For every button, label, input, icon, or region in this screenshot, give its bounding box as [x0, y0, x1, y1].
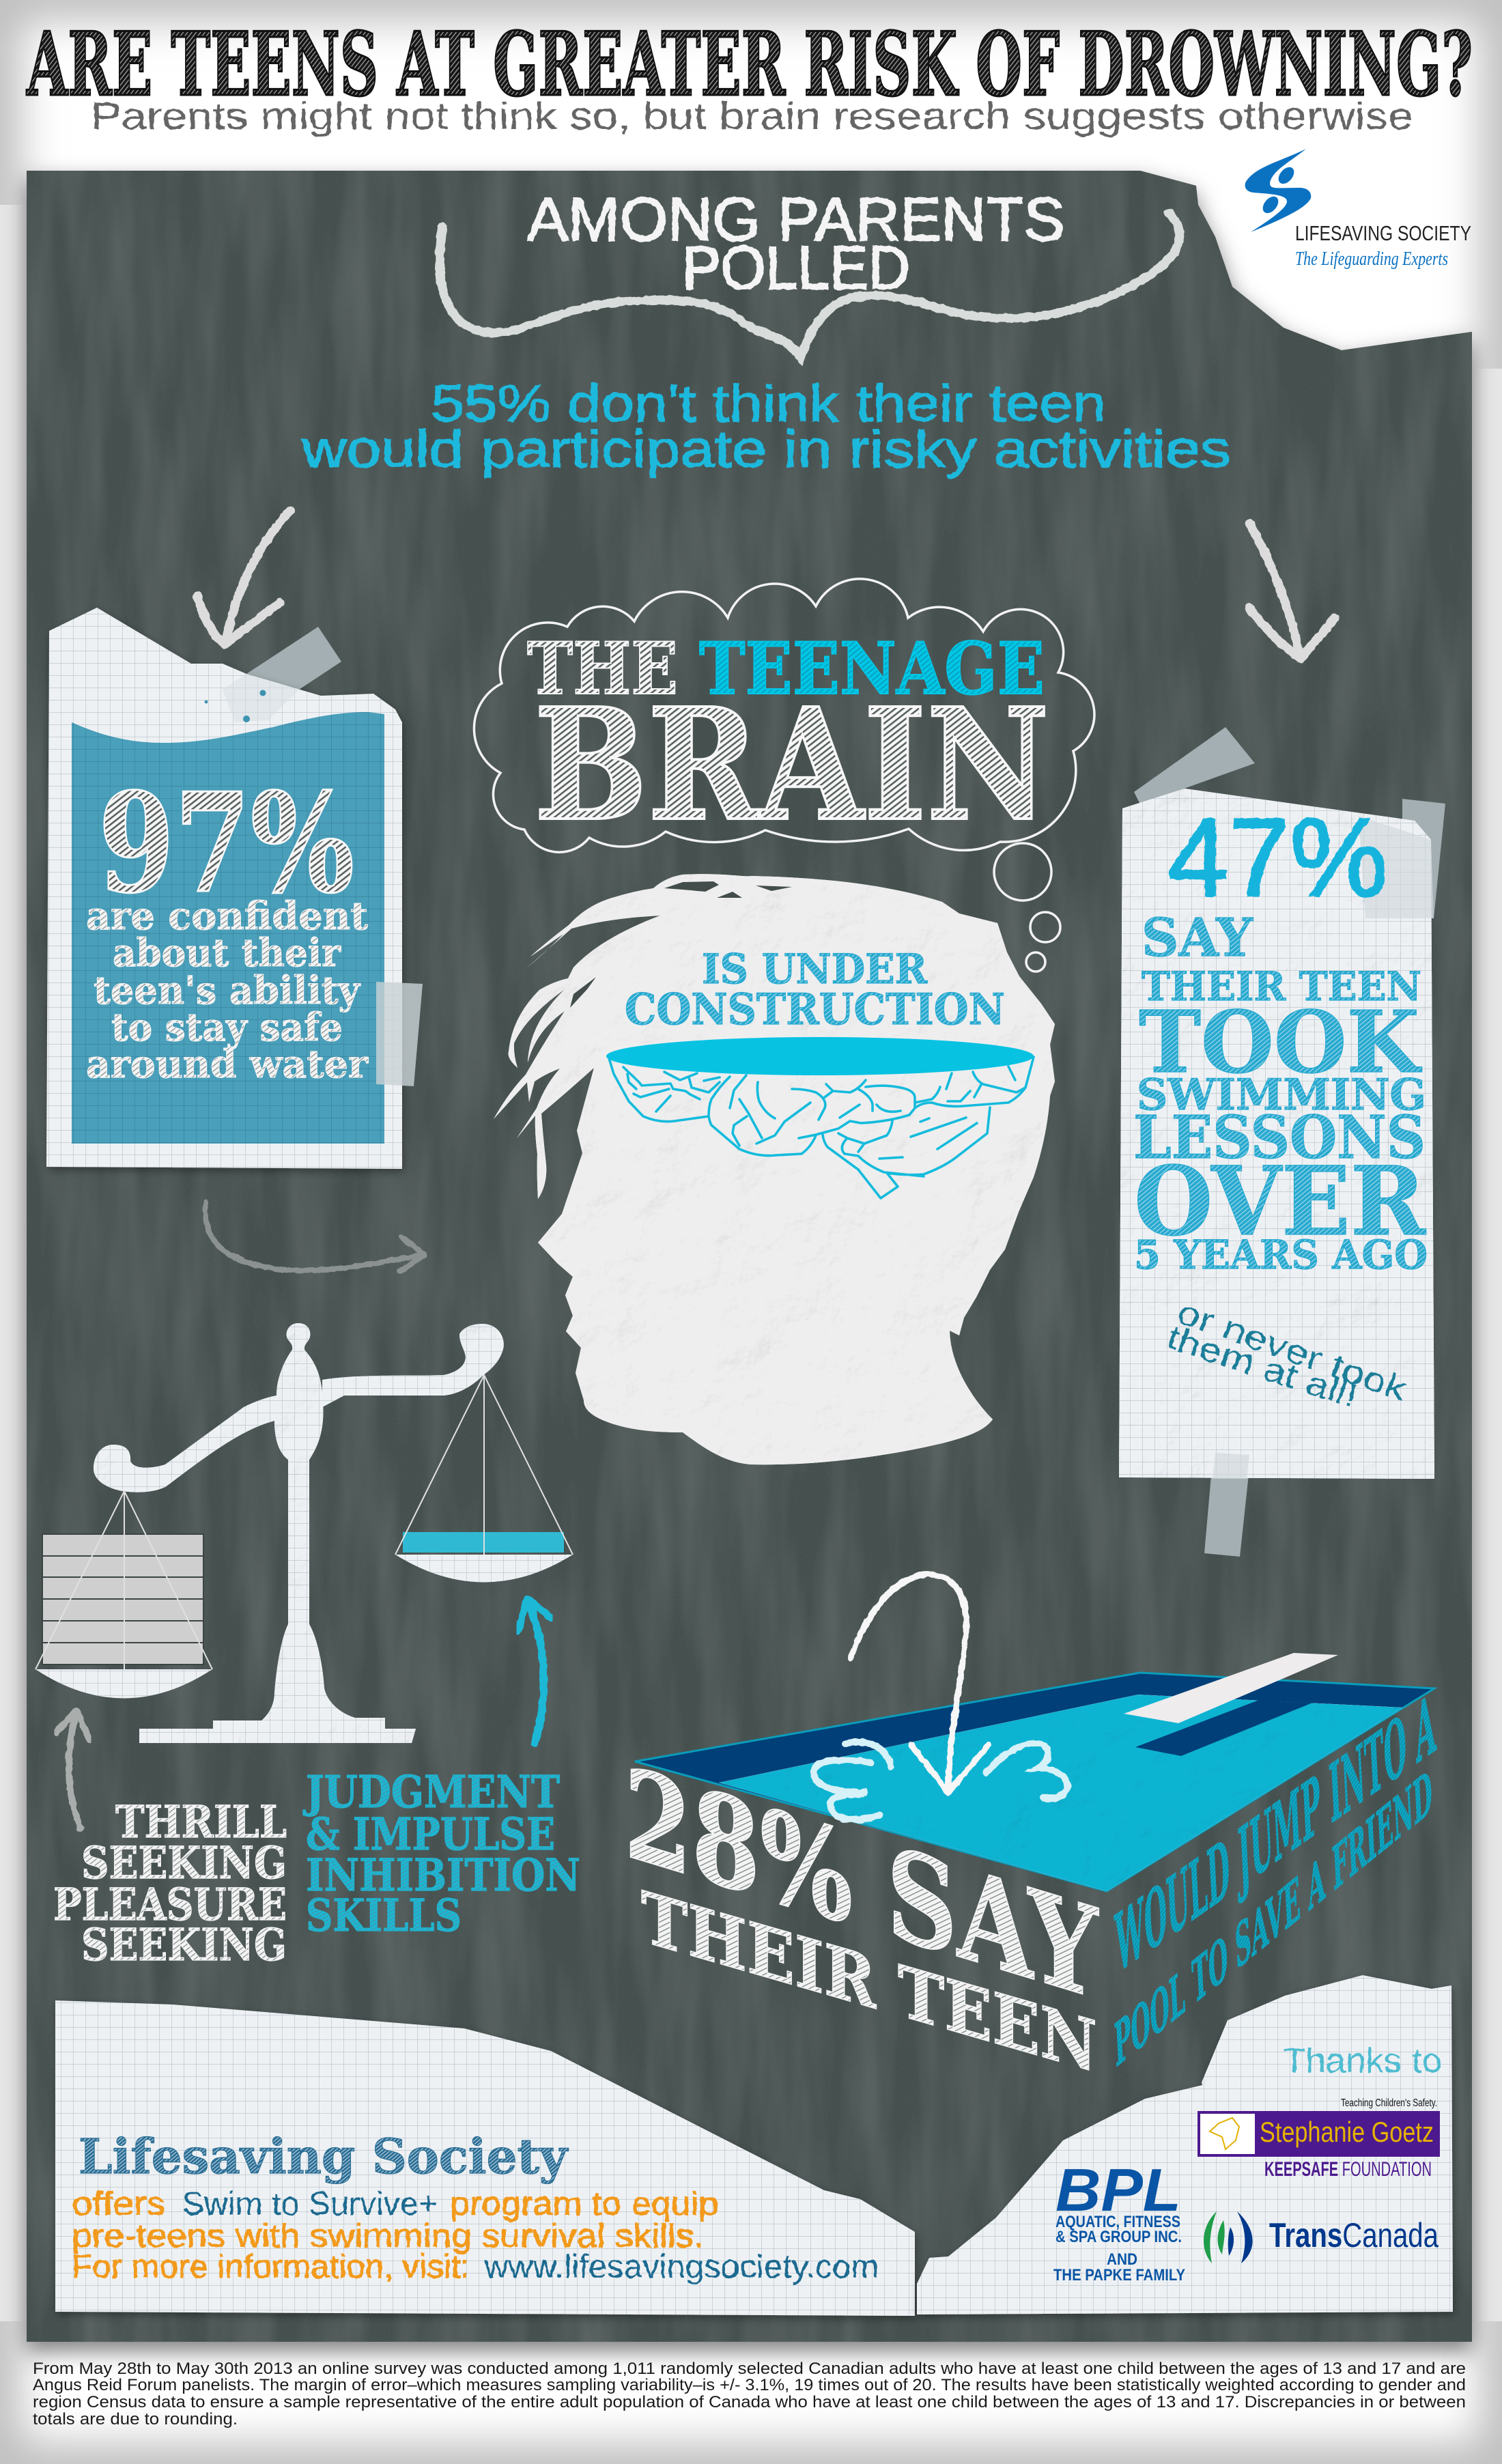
text: is under construction: IS UNDER — [702, 946, 928, 993]
paper sheet — [46, 608, 402, 1169]
text: would jump into a pool — [1113, 1675, 1438, 2082]
text: 28 percent say: 28% SAY — [624, 1738, 1099, 2028]
footnote: totals are due to rounding. — [33, 2410, 238, 2428]
label: judgment skills: & IMPULSE — [306, 1809, 555, 1860]
scale body — [94, 1323, 504, 1743]
footnote: Angus Reid Forum panelists. The margin of error–which measures sampling variability–is +/- 3.1%, 19 times out of 20. The results have been statistically weighted according to gender and — [33, 2376, 1466, 2394]
right strings — [395, 1375, 573, 1555]
text block: lessons: SAY — [1142, 907, 1253, 969]
pool water — [719, 1695, 1403, 1891]
heading: lifesaving society: Lifesaving Society — [79, 2128, 569, 2185]
label: thrill seeking: PLEASURE — [53, 1879, 287, 1931]
arrow: paper to scale — [206, 1202, 425, 1271]
chalk speech bracket — [440, 213, 1180, 357]
pool wall — [635, 1673, 1434, 1891]
note: or never took: or never took — [1172, 1292, 1413, 1408]
arrow: dive into pool — [851, 1574, 989, 1792]
left pan — [36, 1669, 212, 1699]
text block: program: pre-teens with swimming survival skills. — [72, 2218, 704, 2254]
text block: confidence — [86, 894, 369, 1087]
text block: confidence: are confident — [86, 894, 368, 939]
text block: program — [72, 2186, 879, 2285]
tape overlays — [1213, 816, 1434, 1479]
label: judgment skills: SKILLS — [306, 1890, 462, 1942]
heading: among parents polled — [527, 186, 1065, 302]
label: thrill seeking: SEEKING — [81, 1919, 287, 1971]
callout: 55 percent: 55% don't think their teen — [431, 375, 1106, 433]
text block: confidence: teen's ability — [94, 968, 360, 1013]
head silhouette — [494, 874, 1055, 1464]
left pan stack — [42, 1534, 203, 1665]
text block: confidence: to stay safe — [111, 1005, 343, 1050]
text block: lessons: THEIR TEEN — [1142, 963, 1421, 1010]
callout: 55 percent — [301, 375, 1231, 479]
heading: the teenage brain: THE — [527, 626, 678, 711]
panel: sponsors paper — [917, 1975, 1453, 2314]
right pan — [395, 1555, 573, 1583]
arrow: cyan up — [518, 1599, 551, 1743]
text block: lessons: 5 YEARS AGO — [1134, 1232, 1428, 1278]
tape: right — [1402, 799, 1445, 918]
board shadow — [1135, 1700, 1311, 1756]
logo: Lifesaving Society — [1245, 149, 1471, 270]
subtitle: Parents might not think so, but brain research suggests otherwise — [91, 94, 1413, 137]
logo: BPL: & SPA GROUP INC. — [1055, 2228, 1182, 2246]
logo: BPL: AND — [1107, 2250, 1137, 2269]
logo: TransCanada: TransCanada — [1269, 2216, 1439, 2254]
text: thanks to: Thanks to — [1284, 2041, 1442, 2080]
logo: BPL: AQUATIC, FITNESS — [1055, 2213, 1180, 2231]
footnote: region Census data to ensure a sample representative of the entire adult population of Canada who have at least one child between the ages of 13 and 17. Discrepancies in or between — [33, 2393, 1466, 2411]
callout: 55 percent: would participate in risky activities — [301, 421, 1231, 479]
logo: BPL: THE PAPKE FAMILY — [1053, 2266, 1185, 2284]
logo: Stephanie Goetz: Stephanie Goetz — [1260, 2116, 1434, 2148]
label: judgment skills: INHIBITION — [306, 1850, 580, 1901]
heading: among parents polled: POLLED — [682, 234, 910, 302]
footnote — [33, 2360, 1466, 2428]
label: judgment skills — [303, 1766, 580, 1942]
text block: lessons: OVER — [1134, 1145, 1426, 1257]
note: or never took: them at all! — [1163, 1318, 1363, 1415]
arrow: grey up — [56, 1711, 89, 1828]
text block: program: program to equip — [450, 2186, 718, 2222]
water droplets — [205, 690, 266, 722]
water fill — [72, 712, 384, 1144]
text: is under construction — [625, 946, 1005, 1034]
label: thrill seeking: SEEKING — [81, 1837, 287, 1889]
stat: 97 percent: 97% — [98, 763, 354, 924]
heading: the teenage brain — [527, 626, 1049, 855]
label: thrill seeking: THRILL — [115, 1796, 287, 1848]
thought cloud — [474, 579, 1094, 972]
scale — [36, 1323, 573, 1743]
panel: bottom left paper — [55, 2000, 915, 2316]
tape: right — [376, 982, 423, 1086]
heading: the teenage brain: BRAIN — [534, 675, 1049, 855]
translucent tape end — [223, 674, 299, 722]
arrow: chalk left — [197, 511, 290, 644]
text block: program: Swim to Survive+ — [182, 2186, 438, 2222]
text block: lessons: TOOK — [1139, 993, 1422, 1092]
note: or never took — [1163, 1292, 1413, 1415]
logo: BPL — [1053, 2156, 1185, 2284]
tape: bottom — [1204, 1468, 1249, 1557]
text: is under construction: CONSTRUCTION — [625, 984, 1005, 1034]
logo: Lifesaving Society: The Lifeguarding Experts — [1295, 248, 1448, 270]
text block: lessons: SWIMMING — [1137, 1069, 1426, 1120]
right pan weight — [403, 1532, 564, 1553]
text block: lessons — [1133, 907, 1428, 1278]
panel: 47 percent paper — [1119, 727, 1445, 1557]
text block: confidence: around water — [86, 1042, 369, 1087]
stat: 47 percent: 47% — [1167, 795, 1388, 920]
arrow: chalk right — [1249, 523, 1335, 659]
text: their teen: THEIR TEEN — [641, 1875, 1097, 2089]
label: thrill seeking — [53, 1796, 287, 1971]
logo: BPL: BPL — [1055, 2156, 1181, 2224]
icon: swimmer swirl — [1245, 149, 1311, 232]
icon: brain under water line — [606, 1037, 1034, 1198]
left strings — [36, 1491, 212, 1669]
diving board — [1124, 1653, 1338, 1723]
splash marks — [814, 1742, 1067, 1819]
logo: Stephanie Goetz: Teaching Children's Safety. — [1341, 2097, 1437, 2109]
swimming pool — [635, 1653, 1434, 1891]
paper sheet — [1119, 789, 1434, 1479]
footnote: From May 28th to May 30th 2013 an online survey was conducted among 1,011 randomly selected Canadian adults who have at least one child between the ages of 13 and 17 and are — [33, 2360, 1466, 2378]
tape: top — [1134, 727, 1255, 804]
text block: lessons: LESSONS — [1133, 1103, 1426, 1172]
logo: Stephanie Goetz — [1198, 2097, 1440, 2181]
logo: TransCanada — [1204, 2211, 1439, 2263]
heading: among parents polled: AMONG PARENTS — [527, 186, 1065, 254]
logo: Stephanie Goetz: KEEPSAFE FOUNDATION — [1264, 2158, 1432, 2181]
text block: confidence: about their — [113, 931, 341, 976]
text block: program: offers — [72, 2186, 165, 2222]
text block: program: For more information, visit: — [72, 2249, 470, 2285]
panel: 97 percent paper — [46, 608, 423, 1169]
text block: program: www.lifesavingsociety.com — [483, 2249, 879, 2285]
tape: top left — [246, 627, 341, 690]
heading: the teenage brain: TEENAGE — [699, 626, 1045, 711]
thought bubbles — [994, 843, 1060, 972]
label: judgment skills: JUDGMENT — [303, 1766, 560, 1818]
